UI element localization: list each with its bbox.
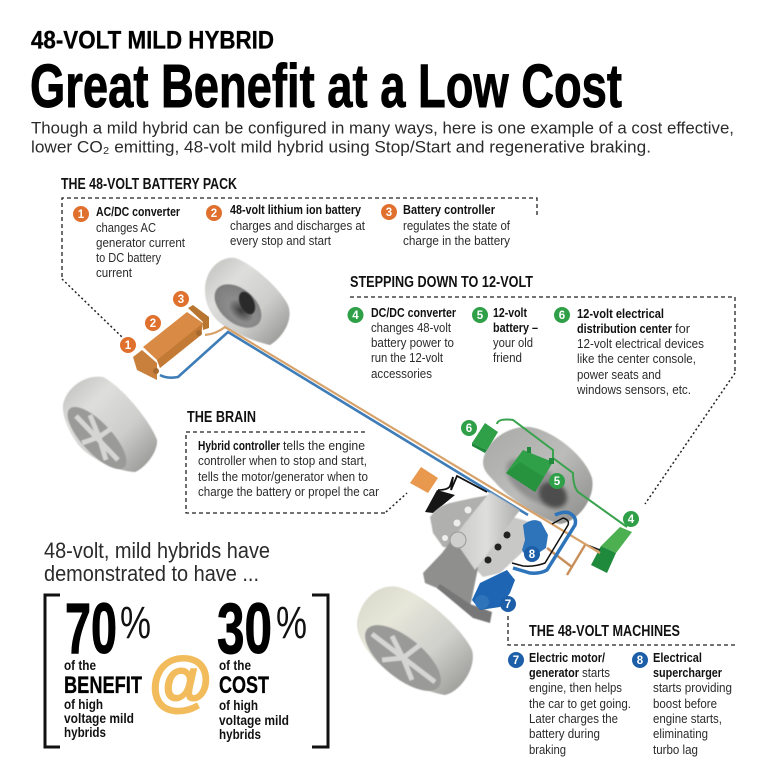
body text: charge the battery or propel the car — [198, 485, 379, 499]
item 7: 7 — [513, 655, 519, 667]
stat: 30 percent cost: COST — [219, 672, 269, 699]
item 4: battery power to — [371, 336, 454, 350]
item 7: starts — [582, 666, 610, 680]
item 6: 12-volt electrical — [577, 307, 664, 321]
item 5 — [472, 306, 538, 365]
intro line 1: Though a mild hybrid can be configured in many ways, here is one example of a cost effective, — [31, 118, 734, 138]
item 1: to DC battery — [96, 251, 162, 265]
stat: 70 percent benefit — [64, 590, 151, 740]
stat: 30 percent cost: 30 — [217, 590, 272, 669]
item 8: supercharger — [653, 666, 722, 680]
item 3 — [381, 203, 511, 248]
panel: benefit and cost stats — [44, 538, 328, 747]
wheel: front right — [483, 427, 593, 524]
callouts on car — [120, 291, 639, 612]
item 4 — [348, 306, 456, 381]
item 7: battery during — [529, 727, 600, 741]
engine — [423, 492, 530, 623]
item 6: 12-volt electrical devices — [577, 337, 704, 351]
item 7: engine, then helps — [529, 681, 622, 695]
item 4: run the 12-volt — [371, 351, 443, 365]
body text — [198, 439, 379, 499]
stat: 30 percent cost: % — [276, 597, 307, 648]
panel: battery pack — [61, 176, 537, 337]
electrical supercharger — [512, 512, 576, 573]
panel: the 48-volt machines — [508, 616, 735, 757]
item 2 — [206, 203, 365, 248]
at symbol: @ — [149, 643, 212, 717]
item 8: eliminating — [653, 727, 708, 741]
item 8: boost before — [653, 697, 717, 711]
item 6: power seats and — [577, 368, 661, 382]
item 2: every stop and start — [230, 234, 331, 248]
item 4: changes 48-volt — [371, 321, 451, 335]
item 7 — [508, 651, 631, 757]
item 4: DC/DC converter — [371, 306, 456, 320]
item 5: battery – — [493, 321, 538, 335]
badge 3: 3 — [178, 294, 184, 306]
panel: stepping down — [348, 274, 735, 504]
badge 6 — [461, 420, 477, 436]
lead text — [44, 538, 270, 586]
item 2: 2 — [211, 208, 217, 220]
kicker: 48-VOLT MILD HYBRID — [31, 26, 274, 54]
item 1: 1 — [78, 209, 85, 221]
tan bracket — [547, 545, 585, 575]
item 1: generator current — [96, 236, 185, 250]
item 6: for — [675, 322, 690, 336]
item 7: generator — [529, 666, 579, 680]
hybrid controller box — [410, 467, 487, 513]
item 1 — [73, 205, 185, 280]
DC/DC converter — [587, 527, 632, 573]
12-volt battery — [506, 447, 554, 492]
item 4: 4 — [352, 310, 359, 322]
badge 6: 6 — [466, 423, 472, 435]
blue 48-volt cable — [160, 332, 528, 515]
item 8 — [632, 651, 732, 757]
tan 12-volt cable — [205, 327, 600, 553]
stat: 70 percent benefit: hybrids — [64, 725, 106, 740]
item 8: turbo lag — [653, 743, 698, 757]
item 7: braking — [529, 743, 566, 757]
badge 7: 7 — [505, 599, 511, 611]
heading: THE 48-VOLT MACHINES — [529, 623, 680, 640]
stat: 30 percent cost: voltage mild — [219, 713, 289, 728]
wheel: rear right — [205, 258, 290, 345]
badge 1 — [120, 337, 136, 353]
item 5: 5 — [477, 310, 484, 322]
badge 3 — [173, 291, 189, 307]
stat: 30 percent cost: of the — [219, 658, 251, 673]
car diagram — [59, 258, 639, 702]
item 6: 6 — [559, 310, 565, 322]
lead text: 48-volt, mild hybrids have — [44, 538, 270, 563]
wheel: rear left — [59, 377, 157, 477]
item 8: Electrical — [653, 651, 702, 665]
badge 1: 1 — [125, 340, 132, 352]
header — [30, 26, 734, 156]
item 5: 12-volt — [493, 306, 528, 320]
stat: 30 percent cost — [217, 590, 307, 742]
item 2: charges and discharges at — [230, 219, 365, 233]
wheel: front left — [355, 586, 473, 702]
stat: 70 percent benefit: BENEFIT — [64, 672, 142, 699]
stat: 70 percent benefit: of high — [64, 697, 103, 712]
item 1: changes AC — [96, 221, 156, 235]
intro line 2: lower CO₂ emitting, 48-volt mild hybrid using Stop/Start and regenerative braking. — [31, 138, 651, 156]
badge 8 — [524, 546, 540, 562]
item 1: AC/DC converter — [96, 205, 180, 219]
body text: tells the motor/generator when to — [198, 470, 368, 484]
badge 4 — [623, 511, 639, 527]
badge 7 — [500, 596, 516, 612]
distribution center — [472, 423, 498, 453]
heading: STEPPING DOWN TO 12-VOLT — [350, 274, 533, 291]
heading: THE 48-VOLT BATTERY PACK — [61, 176, 238, 193]
item 6 — [554, 307, 704, 397]
stat: 30 percent cost: hybrids — [219, 727, 261, 742]
item 6: windows sensors, etc. — [576, 383, 691, 397]
item 8: engine starts, — [653, 712, 722, 726]
item 2: 48-volt lithium ion battery — [230, 203, 361, 217]
stat: 30 percent cost: of high — [219, 698, 258, 713]
item 7: the car to get going. — [529, 697, 631, 711]
stat: 70 percent benefit: % — [120, 597, 151, 648]
stat: 70 percent benefit: voltage mild — [64, 711, 134, 726]
badge 5: 5 — [554, 476, 561, 488]
heading: THE BRAIN — [187, 409, 256, 426]
lead text: demonstrated to have ... — [44, 561, 259, 586]
body text: Hybrid controller — [198, 439, 280, 453]
motor generator — [472, 570, 515, 610]
item 7: Electric motor/ — [529, 651, 605, 665]
item 1: current — [96, 266, 132, 280]
item 3: 3 — [386, 207, 392, 219]
item 8: 8 — [637, 655, 644, 667]
item 8: starts providing — [653, 681, 732, 695]
item 6: distribution center — [577, 322, 672, 336]
item 4: accessories — [371, 367, 432, 381]
green wire — [497, 420, 627, 527]
left bracket — [45, 595, 60, 747]
badge 8: 8 — [529, 549, 536, 561]
item 3: charge in the battery — [403, 234, 511, 248]
item 7: Later charges the — [529, 712, 618, 726]
panel: the brain — [186, 409, 407, 513]
item 3: regulates the state of — [403, 219, 510, 233]
stat: 70 percent benefit: 70 — [65, 590, 117, 669]
badge 2 — [145, 315, 161, 331]
battery pack — [133, 305, 209, 380]
stat: 70 percent benefit: of the — [64, 658, 96, 673]
badge 5 — [549, 473, 565, 489]
item 3: Battery controller — [403, 203, 495, 217]
badge 4: 4 — [628, 514, 635, 526]
body text: controller when to stop and start, — [198, 454, 367, 468]
item 6: like the center console, — [577, 352, 696, 366]
item 5: friend — [493, 351, 522, 365]
right bracket — [312, 595, 328, 747]
badge 2: 2 — [150, 318, 156, 330]
item 5: your old — [493, 336, 533, 350]
body text: tells the engine — [283, 439, 365, 453]
